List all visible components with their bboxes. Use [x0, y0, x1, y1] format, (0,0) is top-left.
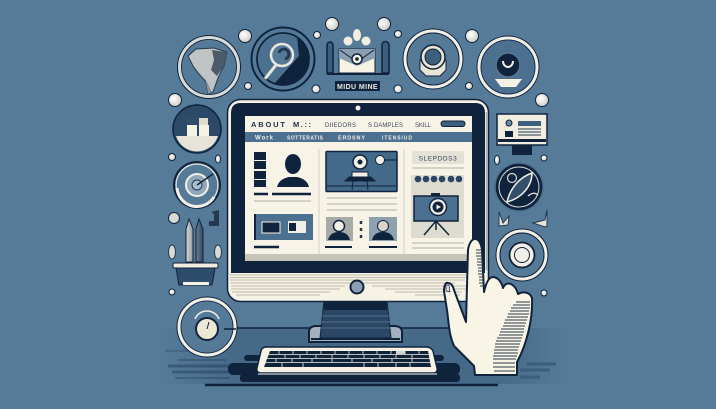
profile block: [254, 152, 311, 201]
icon: envelope with pencils: [327, 29, 389, 74]
nav row: [251, 120, 465, 129]
icon: pencils in pot: [168, 219, 222, 285]
keyboard: [228, 347, 460, 382]
power button: [350, 280, 364, 294]
monitor stand: [309, 301, 402, 342]
icon: magnifier: [252, 28, 314, 90]
blue menu bar: Work: [255, 136, 274, 142]
sidebar button: SLEPDDS3: [419, 156, 457, 162]
blue menu bar: ITENSIUD: [382, 136, 412, 142]
text lines: [327, 198, 397, 210]
icon: camera lens: [402, 28, 464, 90]
nav row: DIIEDORS: [325, 123, 356, 129]
nav row: S DAMPLES: [368, 123, 403, 129]
label: midu mine: MIDU MINE: [337, 84, 378, 91]
blue window panel: [254, 214, 313, 247]
monitor: [228, 100, 488, 302]
blue menu bar: SOTTERATIS: [287, 136, 324, 142]
label: midu mine: [335, 81, 380, 91]
sidebar button: [412, 151, 464, 164]
camera on tripod card: [411, 175, 464, 248]
screen: web page: [245, 116, 472, 261]
icon: speaker and music note: [168, 210, 219, 226]
blue menu bar: ERDSNY: [338, 136, 365, 142]
decorative orbit dots: [168, 18, 548, 296]
icon: globe: [177, 35, 241, 99]
portrait thumbnails: [325, 217, 397, 247]
icon: pointing hand: [444, 239, 532, 375]
icon: gauge: [176, 296, 238, 358]
icon: id card display: [497, 114, 547, 155]
nav row: SKILL: [415, 123, 432, 129]
icon: webcam: [476, 36, 540, 98]
icon: target disc: [173, 161, 221, 209]
desk band: [160, 328, 570, 385]
nav row: ABOUT: [251, 120, 285, 129]
icons: small horn shapes: [499, 210, 547, 227]
blue menu bar: [245, 132, 472, 142]
icon: window blocks: [173, 105, 221, 153]
nav row: M.::: [293, 120, 311, 129]
icon: leaf disc: [495, 163, 543, 211]
video panel: [326, 152, 397, 192]
icon: concentric ring: [496, 228, 548, 282]
